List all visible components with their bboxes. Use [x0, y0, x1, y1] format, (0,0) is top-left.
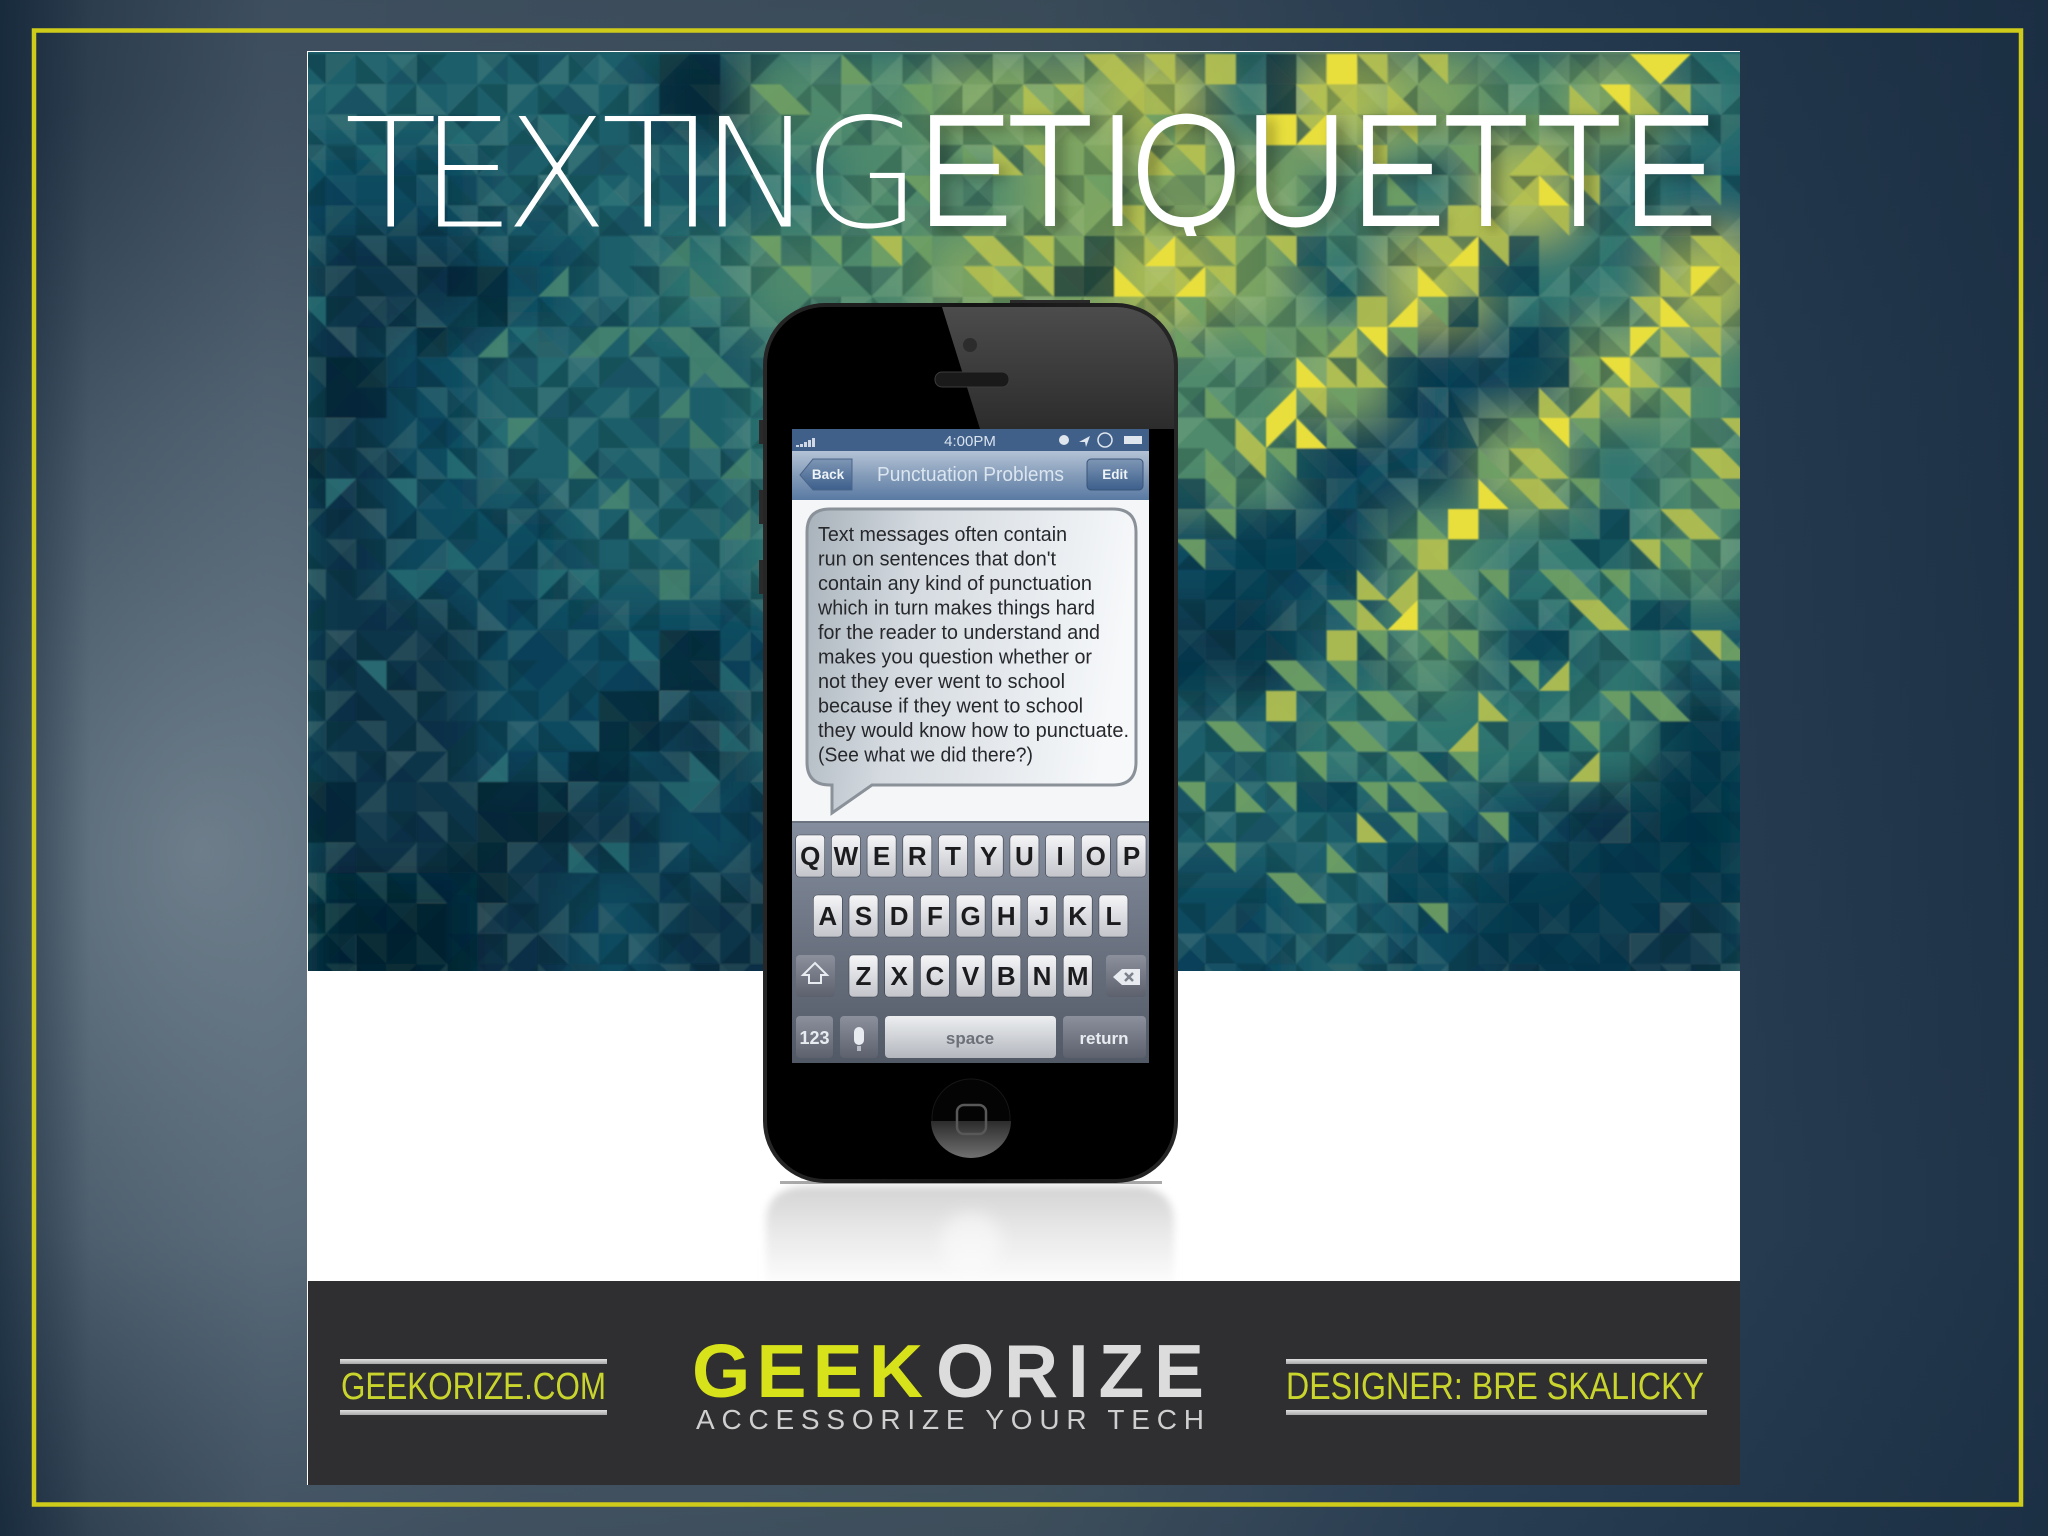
keyboard row 1: Y: [980, 841, 997, 871]
keyboard row 3: Z: [856, 961, 872, 991]
home button: [931, 1079, 1011, 1158]
earpiece speaker: [935, 372, 1009, 387]
keyboard row 4: [796, 1016, 1146, 1058]
glass glare: [942, 307, 1174, 429]
keyboard row 4: space: [946, 1029, 994, 1048]
back button: [800, 459, 852, 490]
navigation bar: Back: [812, 467, 845, 482]
speech bubble: [807, 509, 1136, 813]
navigation bar: [792, 451, 1149, 500]
keyboard row 4: 123: [799, 1028, 830, 1048]
keyboard row 1: [796, 835, 1146, 877]
keyboard row 3: V: [962, 961, 980, 991]
footer right: designer credit: DESIGNER: BRE SKALICKY: [1286, 1366, 1704, 1408]
keyboard row 1: P: [1123, 841, 1140, 871]
message text: (See what we did there?): [818, 744, 1033, 766]
keyboard row 3: B: [997, 961, 1016, 991]
keyboard row 2: J: [1035, 901, 1049, 931]
keyboard row 2: F: [927, 901, 943, 931]
keyboard row 3: [796, 955, 1146, 997]
top band colour map: [659, 54, 750, 145]
keyboard: [792, 821, 1149, 1063]
keyboard row 2: S: [855, 901, 872, 931]
footer centre: Geekorize logo: GEEK: [692, 1329, 923, 1413]
message area: [792, 500, 1149, 821]
nav title: Punctuation Problems: [877, 464, 1064, 486]
message text: for the reader to understand and: [818, 622, 1100, 644]
keyboard row 3: X: [891, 961, 909, 991]
footer left: website: [340, 1359, 607, 1415]
message text: Text messages often contain: [818, 524, 1067, 546]
message text: run on sentences that don't: [818, 548, 1056, 570]
keyboard row 1: W: [834, 841, 859, 871]
keyboard row 1: U: [1015, 841, 1034, 871]
phone screen: [792, 429, 1149, 1063]
status bar: 4:00PM: [944, 433, 996, 450]
keyboard row 1: T: [945, 841, 961, 871]
panel: infographic poster: [307, 51, 1740, 1485]
title: TEXTING ETIQUETTE: [348, 112, 1720, 236]
phone side buttons: [759, 300, 1090, 594]
navigation bar: Edit: [1102, 467, 1128, 482]
keyboard row 2: [813, 895, 1128, 937]
message text: they would know how to punctuate.: [818, 720, 1129, 742]
keyboard row 1: R: [908, 841, 927, 871]
keyboard row 1: O: [1086, 841, 1106, 871]
keyboard row 1: Q: [800, 841, 820, 871]
keyboard row 3: N: [1033, 961, 1051, 991]
keyboard row 2: A: [818, 901, 837, 931]
title word: TEXTING: TEXTING: [344, 86, 922, 264]
front camera: [963, 338, 977, 352]
keyboard row 4: return: [1079, 1029, 1129, 1048]
footer left: website: GEEKORIZE.COM: [341, 1366, 606, 1408]
keyboard row 2: H: [997, 901, 1016, 931]
keyboard row 1: E: [873, 841, 890, 871]
dark footer bar: [308, 1281, 1740, 1485]
mosaic triangle background: [308, 52, 1740, 971]
footer content: [340, 1329, 1707, 1435]
phone reflection: [764, 1181, 1176, 1268]
keyboard row 2: L: [1105, 901, 1121, 931]
message text: which in turn makes things hard: [817, 598, 1095, 620]
keyboard row 2: D: [890, 901, 909, 931]
message text: contain any kind of punctuation: [818, 573, 1092, 595]
white floor band: [308, 971, 1740, 1280]
message text: because if they went to school: [818, 696, 1083, 718]
keyboard row 3: C: [926, 961, 945, 991]
footer centre: Geekorize logo: ORIZE: [936, 1329, 1204, 1413]
keyboard row 2: K: [1068, 901, 1087, 931]
phone body: [763, 303, 1178, 1183]
edit button: [1087, 459, 1143, 490]
message text: not they ever went to school: [818, 671, 1065, 693]
status bar: [792, 429, 1149, 451]
footer right: designer credit: [1286, 1359, 1707, 1415]
footer centre: Geekorize logo: [692, 1329, 1204, 1435]
message text: makes you question whether or: [818, 646, 1092, 668]
logo tagline: ACCESSORIZE YOUR TECH: [696, 1404, 1204, 1435]
keyboard row 2: G: [960, 901, 981, 931]
smartphone: [759, 300, 1178, 1183]
title word: ETIQUETTE: ETIQUETTE: [916, 80, 1719, 263]
keyboard row 1: I: [1056, 841, 1064, 871]
keyboard row 3: M: [1067, 961, 1089, 991]
